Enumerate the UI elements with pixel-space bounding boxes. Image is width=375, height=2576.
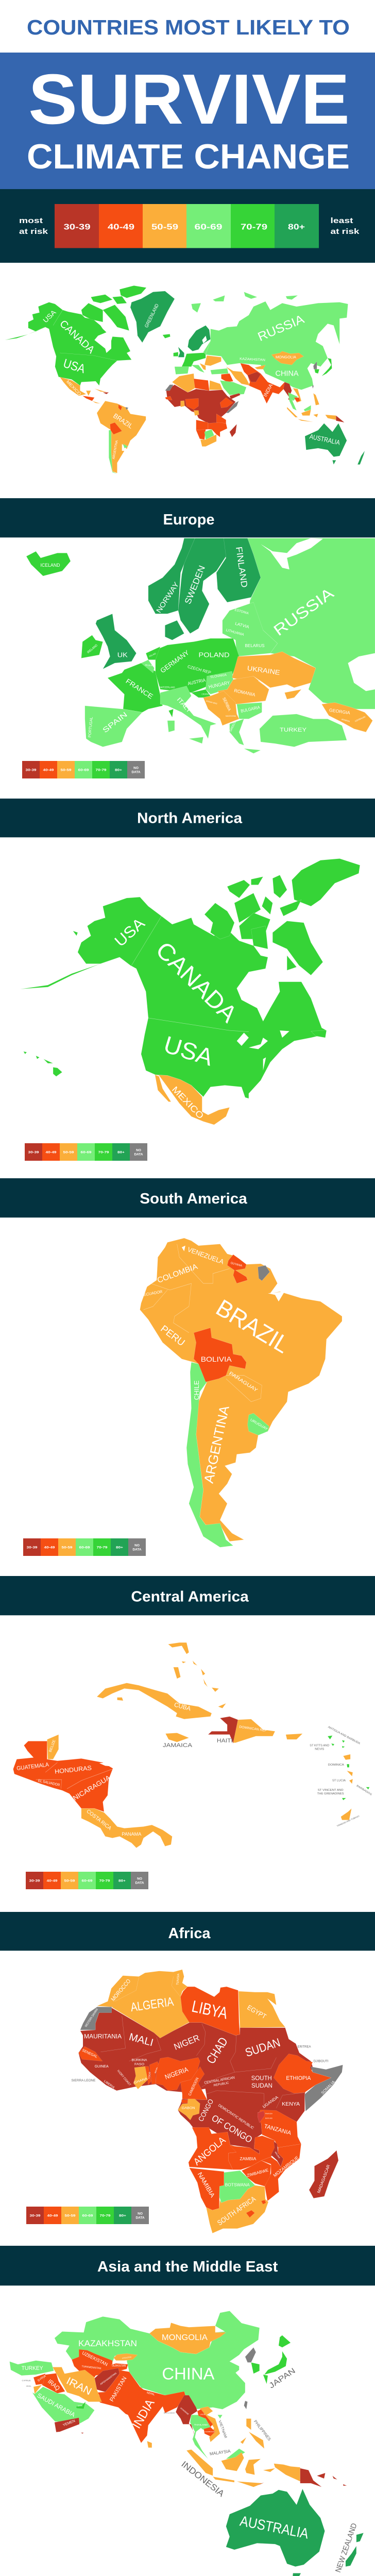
Africa country labels: CHAD xyxy=(204,2035,231,2066)
main risk legend band: 80+ xyxy=(288,223,305,232)
section heading: South America xyxy=(0,1178,375,1218)
Central America country labels: PANAMA xyxy=(122,1832,141,1837)
legend: Europe: 40-49 xyxy=(43,769,54,772)
Europe country labels: GERMANY xyxy=(159,649,191,674)
Africa country labels: GUINEA xyxy=(95,2065,109,2069)
Central America country labels: BELIZE xyxy=(48,1739,57,1753)
Central America country labels: GUATEMALA xyxy=(16,1761,49,1772)
Central America country labels: ST VINCENT AND xyxy=(318,1789,344,1792)
Africa country labels: CAMEROON xyxy=(187,2077,200,2096)
Africa country labels: SUDAN xyxy=(251,2082,272,2089)
Asia country labels xyxy=(22,2333,359,2573)
Europe country labels: FINLAND xyxy=(234,546,249,588)
panel: Africa map xyxy=(26,1970,343,2233)
Asia country labels: NEW ZEALAND xyxy=(334,2522,359,2573)
Central America country labels: ST LUCIA xyxy=(332,1780,346,1783)
Europe map shapes xyxy=(26,538,375,753)
legend: Central America: 40-49 xyxy=(46,1879,58,1883)
South America country labels: VENEZUELA xyxy=(186,1245,225,1266)
Asia country labels: INDONESIA xyxy=(179,2459,226,2499)
Africa country labels: RWANDA xyxy=(265,2112,272,2114)
Asia country labels: BANGLADESH xyxy=(164,2412,175,2414)
Central America country labels: NICARAGUA xyxy=(72,1773,112,1802)
legend: Africa: 40-49 xyxy=(47,2214,58,2217)
Africa country labels: ZIMBABWE xyxy=(246,2168,269,2178)
Europe country labels: SPAIN xyxy=(101,710,129,734)
legend: South America: 80+ xyxy=(116,1546,123,1550)
Europe country labels: GREECE xyxy=(229,720,237,732)
Africa country labels: TOGO xyxy=(148,2072,151,2079)
Africa country labels: CENTRAL AFRICAN xyxy=(204,2076,235,2085)
legend: South America: NO xyxy=(134,1544,140,1548)
Asia country labels: TAJIKISTAN xyxy=(111,2365,126,2368)
panel: Central America map xyxy=(13,1642,372,1889)
Europe country labels: BELARUS xyxy=(245,643,265,648)
world map country labels: MONGOLIA xyxy=(276,355,296,360)
Africa country labels: MAURITANIA xyxy=(84,2033,122,2040)
title band: survive climate change xyxy=(0,53,375,189)
legend: Europe: DATA xyxy=(131,771,141,774)
world map shapes xyxy=(5,285,365,474)
legend: South America: 40-49 xyxy=(44,1546,55,1550)
legend: Europe: NO xyxy=(133,767,139,770)
Africa country labels: OF CONGO xyxy=(210,2113,254,2145)
section heading: North America xyxy=(0,799,375,838)
Africa country labels: ERITREA xyxy=(298,2045,311,2049)
Europe country labels: MOLDOVA xyxy=(258,680,266,686)
South America country labels: BRAZIL xyxy=(212,1294,294,1358)
Europe country labels: SWEDEN xyxy=(183,564,207,605)
Europe country labels xyxy=(40,546,366,738)
South America country labels: COLOMBIA xyxy=(156,1262,199,1285)
legend: Europe: 50-59 xyxy=(61,769,72,772)
South America country labels: PERU xyxy=(159,1324,186,1348)
South America country labels: CHILE xyxy=(193,1380,200,1400)
Europe country labels: PORTUGAL xyxy=(87,717,94,738)
section heading: South America: South America xyxy=(140,1191,248,1207)
legend: North America: DATA xyxy=(134,1153,143,1156)
Europe country labels: ESTONIA xyxy=(234,608,249,616)
main risk legend band: 60-69 xyxy=(195,223,223,232)
main risk legend band: most xyxy=(19,216,43,225)
Africa country labels: SENEGAL xyxy=(81,2048,98,2059)
Asia country labels: LAOS xyxy=(200,2413,206,2415)
legend: North America: 30-39 xyxy=(28,1151,39,1154)
Africa country labels: FASO xyxy=(134,2062,144,2066)
legend: Central America xyxy=(26,1872,148,1889)
Africa country labels: EGYPT xyxy=(246,2004,268,2021)
Africa country labels: SIERRA LEONE xyxy=(71,2079,96,2082)
North America country labels: USA xyxy=(161,1030,216,1071)
Central America country labels: DOMINICAN REP xyxy=(239,1725,267,1733)
main risk legend band: 40-49 xyxy=(108,223,134,232)
legend: Europe xyxy=(22,761,145,778)
section heading: Europe: Europe xyxy=(163,512,214,528)
legend: North America: 50-59 xyxy=(63,1151,74,1154)
Europe country labels: FRANCE xyxy=(124,677,155,701)
world map country labels: CANADA xyxy=(57,318,97,356)
legend: Africa: NO xyxy=(138,2212,143,2215)
Africa country labels: KENYA xyxy=(282,2102,300,2107)
Asia country labels: PHILIPPINES xyxy=(253,2419,272,2442)
Africa country labels: REPUBLIC xyxy=(213,2081,230,2088)
panel: South America map xyxy=(23,1238,342,1556)
Central America country labels: TRINIDAD AND TOBAGO xyxy=(336,1815,360,1827)
North America country labels xyxy=(111,915,243,1121)
Asia country labels: JAPAN xyxy=(267,2366,297,2391)
Africa country labels: ZAMBIA xyxy=(240,2157,257,2161)
Central America country labels: ST KITTS AND xyxy=(310,1744,329,1747)
Europe country labels: UK xyxy=(117,651,128,658)
Africa country labels: TANZANIA xyxy=(263,2123,292,2137)
Asia country labels: MONGOLIA xyxy=(162,2333,208,2342)
Asia country labels: SAUDI ARABIA xyxy=(36,2392,76,2418)
legend: Africa xyxy=(26,2207,149,2224)
Asia country labels: AFGHANISTAN xyxy=(99,2372,117,2385)
Europe country labels: LITHUANIA xyxy=(226,629,245,637)
title: countries most likely to: COUNTRIES MOST LIKELY TO xyxy=(27,15,350,39)
section heading: Africa: Africa xyxy=(168,1925,211,1942)
Europe country labels: IRELAND xyxy=(87,644,98,654)
Africa country labels: IVORY COAST xyxy=(116,2070,131,2087)
Africa country labels: DEMOCRATIC REPUBLIC xyxy=(217,2104,254,2130)
legend: North America: 80+ xyxy=(117,1151,125,1154)
South America country labels: ECUADOR xyxy=(143,1289,163,1297)
Asia country labels: TURKMENISTAN xyxy=(81,2365,101,2370)
legend: North America: 60-69 xyxy=(80,1151,92,1154)
section heading: North America: North America xyxy=(137,810,243,826)
South America country labels xyxy=(143,1245,294,1485)
Europe country labels: LATVIA xyxy=(234,621,250,630)
Europe country labels: ICELAND xyxy=(40,563,60,568)
section heading: Asia and the Middle East: Asia and the Middle East xyxy=(97,2259,278,2275)
legend: Central America: 80+ xyxy=(118,1879,126,1883)
Asia country labels: IRAQ xyxy=(46,2378,61,2392)
Asia country labels: YEMEN xyxy=(62,2419,76,2428)
Asia country labels: MYANMAR xyxy=(180,2407,190,2415)
Europe country labels: HOLLAND xyxy=(149,652,156,657)
Europe country labels: BULGARIA xyxy=(240,704,261,714)
title band: survive climate change: CLIMATE CHANGE xyxy=(27,137,350,176)
section heading: Africa xyxy=(0,1912,375,1951)
Asia country labels: TURKEY xyxy=(22,2365,43,2371)
Africa country labels: TUNISIA xyxy=(176,1974,180,1985)
legend: Europe: 80+ xyxy=(115,769,122,772)
legend: Central America: 50-59 xyxy=(64,1879,75,1883)
South America country labels: URUGUAY xyxy=(249,1418,268,1431)
Asia country labels: MALAYSIA xyxy=(209,2448,231,2456)
Africa country labels: MALI xyxy=(128,2031,155,2048)
legend: Europe: 60-69 xyxy=(78,769,89,772)
Central America country labels: ANTIGUA AND BARBUDA xyxy=(327,1726,361,1745)
Europe country labels: SWITZERLAND xyxy=(159,686,175,688)
Europe country labels: CROATIA xyxy=(201,693,209,696)
Africa country labels: GHANA xyxy=(133,2077,148,2085)
legend: Europe: 70-79 xyxy=(96,769,107,772)
world map country labels: ARGENTINA xyxy=(112,440,119,460)
Europe country labels: NORWAY xyxy=(155,580,181,614)
Europe country labels: CZECH REP xyxy=(187,664,212,675)
legend: South America: 50-59 xyxy=(62,1546,73,1550)
North America country labels: MEXICO xyxy=(170,1084,206,1121)
panel: North America map xyxy=(20,859,360,1161)
Africa country labels: CONGO xyxy=(197,2098,215,2123)
legend: Africa: 30-39 xyxy=(30,2214,41,2217)
Asia country labels: AUSTRALIA xyxy=(238,2513,310,2542)
legend: Africa: DATA xyxy=(135,2216,145,2219)
Central America country labels: COSTA RICA xyxy=(86,1808,112,1832)
Europe country labels: ARMENIA xyxy=(341,718,350,723)
legend: Europe: 30-39 xyxy=(26,769,37,772)
main risk legend band: 30-39 xyxy=(64,223,91,232)
Europe country labels: AUSTRIA xyxy=(187,677,206,686)
Asia country labels: KAZAKHSTAN xyxy=(78,2338,137,2348)
Asia country labels: QATAR xyxy=(78,2405,82,2407)
legend: South America: 60-69 xyxy=(79,1546,90,1550)
Africa country labels: WESTERN SAHARA xyxy=(84,2008,99,2028)
world map country labels: KAZAKHSTAN xyxy=(240,357,266,362)
Africa country labels: SOMALIA xyxy=(320,2079,336,2095)
legend: North America xyxy=(25,1143,147,1161)
Asia country labels: IRAN xyxy=(64,2375,93,2398)
Asia country labels: VIETNAM xyxy=(217,2420,227,2438)
Asia country labels: NEPAL xyxy=(146,2392,155,2396)
Central America country labels: HAITI xyxy=(217,1738,233,1744)
Europe country labels: TURKEY xyxy=(280,727,307,733)
legend: Africa: 70-79 xyxy=(100,2214,111,2217)
Africa country labels: BURKINA xyxy=(132,2059,147,2062)
Africa country labels: BURUNDI xyxy=(265,2117,272,2119)
legend: Africa: 60-69 xyxy=(82,2214,93,2217)
Africa country labels: GABON xyxy=(182,2107,195,2110)
Asia country labels: INDIA xyxy=(130,2397,158,2431)
Central America map shapes xyxy=(13,1642,369,1848)
world map country labels: AUSTRALIA xyxy=(309,432,341,447)
world map country labels: MEXICO xyxy=(65,380,82,396)
Africa country labels: MALAWI xyxy=(274,2151,281,2159)
Africa country labels: LIBYA xyxy=(190,1997,230,2023)
Africa country labels: ETHIOPIA xyxy=(286,2075,311,2081)
Africa country labels xyxy=(71,1974,336,2227)
section heading: Asia and the Middle East xyxy=(0,2246,375,2286)
panel: Asia and Middle East map xyxy=(10,2311,364,2576)
Central America country labels: BARBADOS xyxy=(356,1784,372,1797)
Europe country labels: POLAND xyxy=(199,651,230,658)
Asia country labels: UZBEKISTAN xyxy=(81,2350,109,2367)
section heading: Central America xyxy=(0,1576,375,1616)
Asia country labels: KYRGYZSTAN xyxy=(122,2356,132,2360)
Africa country labels: UGANDA xyxy=(262,2095,279,2109)
world map country labels: USA xyxy=(61,357,87,376)
Asia country labels: ISRAEL xyxy=(26,2385,31,2387)
Europe country labels: GEORGIA xyxy=(329,707,351,716)
Europe country labels: ITALY xyxy=(176,696,193,714)
South America country labels: BOLIVIA xyxy=(201,1355,232,1363)
legend: Central America: 70-79 xyxy=(99,1879,110,1883)
legend: South America: 30-39 xyxy=(27,1546,38,1550)
Europe country labels: SERBIA xyxy=(221,697,232,712)
South America country labels: ARGENTINA xyxy=(201,1404,232,1485)
main risk legend band: least xyxy=(331,216,353,225)
Africa country labels: NIGER xyxy=(173,2033,201,2052)
Europe country labels: HUNGARY xyxy=(208,680,231,690)
world map country labels: INDIA xyxy=(263,383,274,398)
legend: North America: 70-79 xyxy=(98,1151,109,1154)
world map country labels xyxy=(41,303,341,460)
Europe country labels: BELGIUM xyxy=(145,664,153,667)
main risk legend band: at risk xyxy=(19,227,48,236)
Africa country labels: SUDAN xyxy=(244,2036,282,2059)
legend: Central America: DATA xyxy=(135,1882,144,1885)
panel: Europe map xyxy=(22,538,375,778)
Central America country labels: NEVIS xyxy=(315,1748,325,1751)
Europe country labels: MACEDONIA xyxy=(226,715,236,717)
legend: Central America: 60-69 xyxy=(81,1879,93,1883)
main risk legend band: 70-79 xyxy=(241,223,267,232)
North America map shapes xyxy=(20,859,360,1125)
Africa country labels: LIBERIA xyxy=(103,2080,115,2090)
legend: North America: NO xyxy=(136,1149,141,1152)
Africa country labels: BENIN xyxy=(154,2067,158,2074)
section heading: Europe xyxy=(0,498,375,538)
world map country labels: GREENLAND xyxy=(144,303,160,329)
Europe country labels: ROMANIA xyxy=(233,688,256,698)
Africa country labels: MOZAMBIQUE xyxy=(272,2155,300,2178)
South America map shapes xyxy=(140,1238,342,1547)
Europe country labels: BOSNIA HERZ xyxy=(206,700,218,705)
main risk legend band: at risk xyxy=(331,227,360,236)
Europe country labels: UKRAINE xyxy=(247,664,281,676)
North America country labels: USA xyxy=(111,915,148,950)
Asia country labels: SYRIA xyxy=(37,2375,46,2383)
panel: world map xyxy=(5,285,365,474)
world map country labels: RUSSIA xyxy=(256,312,306,344)
Europe country labels: AZERBAIJAN xyxy=(354,715,366,722)
Central America country labels: JAMAICA xyxy=(163,1742,193,1749)
legend: Central America: NO xyxy=(137,1877,142,1880)
Africa country labels: ANGOLA xyxy=(192,2135,228,2168)
Africa country labels: NAMIBIA xyxy=(196,2171,216,2199)
Africa country labels: MADAGASCAR xyxy=(316,2164,331,2194)
South America country labels: GUYANA xyxy=(230,1262,243,1268)
Africa country labels: BOTSWANA xyxy=(225,2182,250,2188)
Asia country labels: CAMBODIA xyxy=(204,2431,215,2433)
Central America country labels: HONDURAS xyxy=(54,1764,92,1775)
Asia map shapes xyxy=(10,2311,364,2576)
Asia country labels: CYPRUS xyxy=(22,2380,31,2382)
legend: Africa: 80+ xyxy=(119,2214,126,2217)
Central America country labels xyxy=(16,1701,372,1837)
Central America country labels: EL SALVADOR xyxy=(38,1779,60,1787)
Africa country labels: NIGERIA xyxy=(164,2065,189,2081)
legend: North America: 40-49 xyxy=(45,1151,57,1154)
Africa country labels: MOROCCO xyxy=(110,1978,132,2003)
Africa country labels: ALGERIA xyxy=(130,1995,175,2014)
world map country labels: CHINA xyxy=(275,369,299,378)
Central America country labels: THE GRENADINES xyxy=(317,1792,344,1795)
Asia country labels: THAILAND xyxy=(194,2424,208,2426)
world map country labels: USA xyxy=(41,308,58,324)
main risk legend band: 50-59 xyxy=(151,223,178,232)
Africa country labels: SOUTH xyxy=(251,2074,272,2081)
Central America country labels: CUBA xyxy=(174,1701,192,1713)
main risk legend band xyxy=(0,189,375,263)
Central America country labels: DOMINICA xyxy=(328,1764,344,1767)
legend: Central America: 30-39 xyxy=(29,1879,40,1883)
Asia country labels: PAKISTAN xyxy=(109,2376,128,2403)
North America country labels: CANADA xyxy=(151,936,243,1027)
title band: survive climate change: SURVIVE xyxy=(28,60,350,139)
South America country labels: PARAGUAY xyxy=(228,1370,259,1394)
world map country labels: BRAZIL xyxy=(112,412,134,430)
Africa map shapes xyxy=(78,1970,343,2233)
Africa country labels: DJIBOUTI xyxy=(314,2060,329,2063)
Europe country labels: RUSSIA xyxy=(270,585,337,639)
legend: Africa: 50-59 xyxy=(65,2214,76,2217)
Europe country labels: SLOVAKIA xyxy=(210,673,227,679)
legend: South America: 70-79 xyxy=(97,1546,108,1550)
Asia country labels: CHINA xyxy=(162,2364,215,2383)
legend: South America: DATA xyxy=(132,1548,142,1552)
Africa country labels: SOUTH AFRICA xyxy=(216,2194,258,2227)
legend: South America xyxy=(23,1538,146,1556)
section heading: Central America: Central America xyxy=(131,1589,249,1605)
